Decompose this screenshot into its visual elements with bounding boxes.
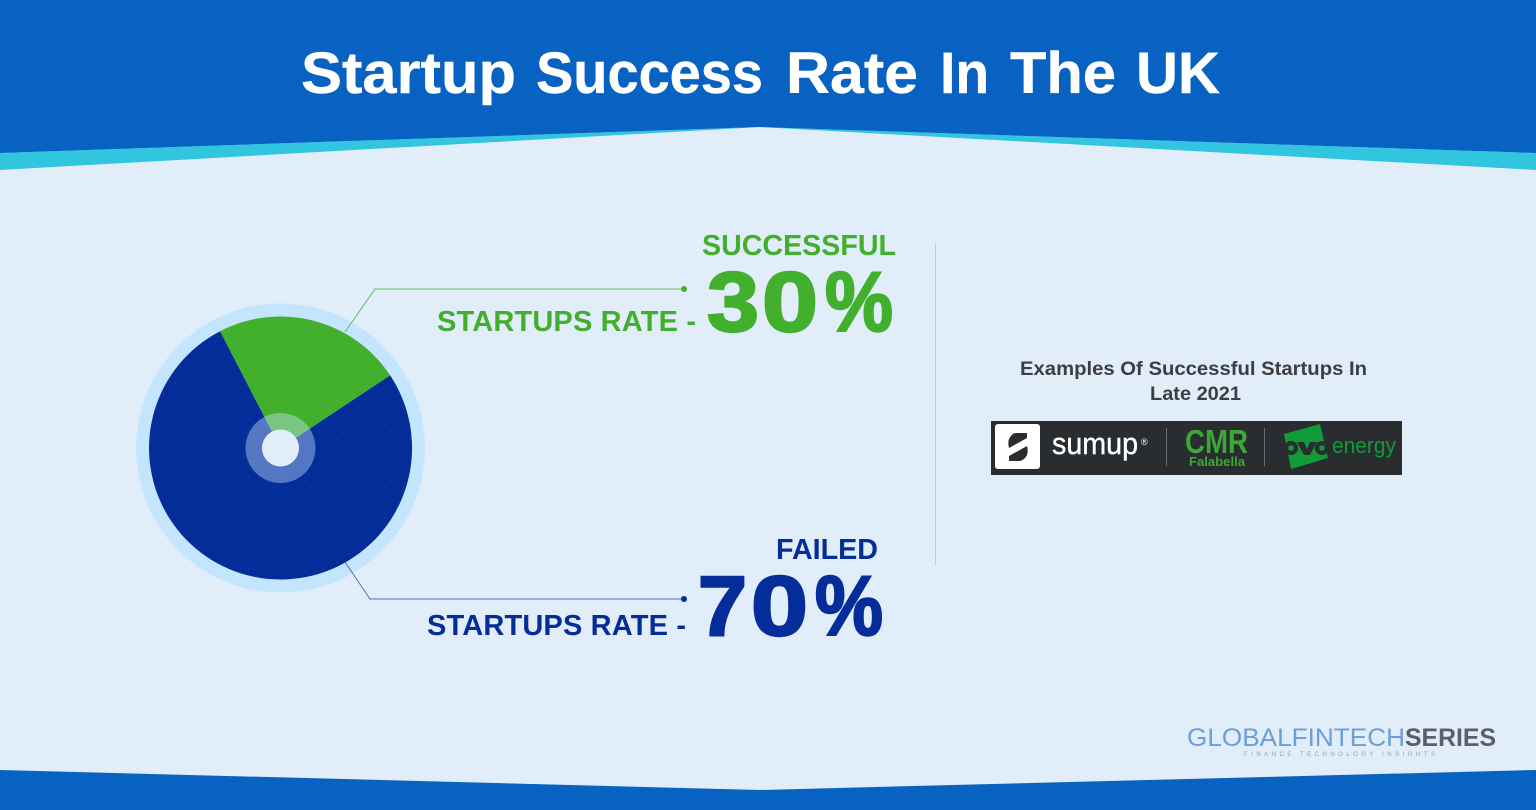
title: The (1010, 41, 1116, 106)
pie slice: failed 70% (149, 331, 412, 579)
value: 70%: 7 (698, 559, 747, 653)
examples heading: Late 2021 (1150, 383, 1241, 405)
title: Rate (786, 41, 918, 106)
logo: CMR Falabella: Falabella (1189, 455, 1246, 469)
examples heading (1020, 358, 1367, 405)
logo: sumup: sumup (1052, 426, 1138, 461)
pie centre ring (246, 413, 316, 483)
brand logo: SERIES (1405, 724, 1496, 752)
footer band (0, 770, 1536, 810)
pie centre hole (262, 430, 299, 466)
label: failed: FAILED (776, 534, 878, 566)
logo strip (991, 421, 1402, 475)
title: UK (1136, 41, 1220, 106)
value: 30%: 0 (762, 255, 818, 349)
pie halo (136, 304, 425, 592)
brand logo (1187, 724, 1496, 758)
value: 70%: % (815, 559, 883, 653)
brand logo: GLOBALFINTECH (1187, 724, 1405, 752)
value: 30%: 3 (707, 255, 759, 349)
title: Success (536, 41, 763, 106)
logo: ovo energy: energy (1332, 433, 1396, 458)
logo: sumup: ® (1141, 437, 1148, 447)
title: In (940, 41, 989, 106)
logo: sumup (995, 424, 1148, 469)
title: Startup (301, 41, 516, 106)
label: startups rate failed: STARTUPS RATE - (427, 610, 686, 642)
logo: ovo energy (1284, 424, 1396, 469)
value: 30%: % (825, 255, 893, 349)
logo: CMR Falabella: CMR (1185, 423, 1248, 460)
pie chart (136, 304, 425, 592)
examples heading: Examples Of Successful Startups In (1020, 358, 1367, 380)
value: 70%: 0 (751, 559, 808, 653)
label: startups rate successful: STARTUPS RATE - (437, 306, 696, 338)
callout line: successful (345, 286, 687, 332)
brand logo: FINANCE TECHNOLOGY INSIGHTS (1244, 752, 1435, 758)
logo: CMR Falabella (1185, 423, 1248, 469)
label: successful: SUCCESSFUL (702, 230, 896, 262)
pie slice: successful 30% (220, 316, 390, 448)
callout line: failed (345, 562, 687, 602)
header band (0, 0, 1536, 170)
